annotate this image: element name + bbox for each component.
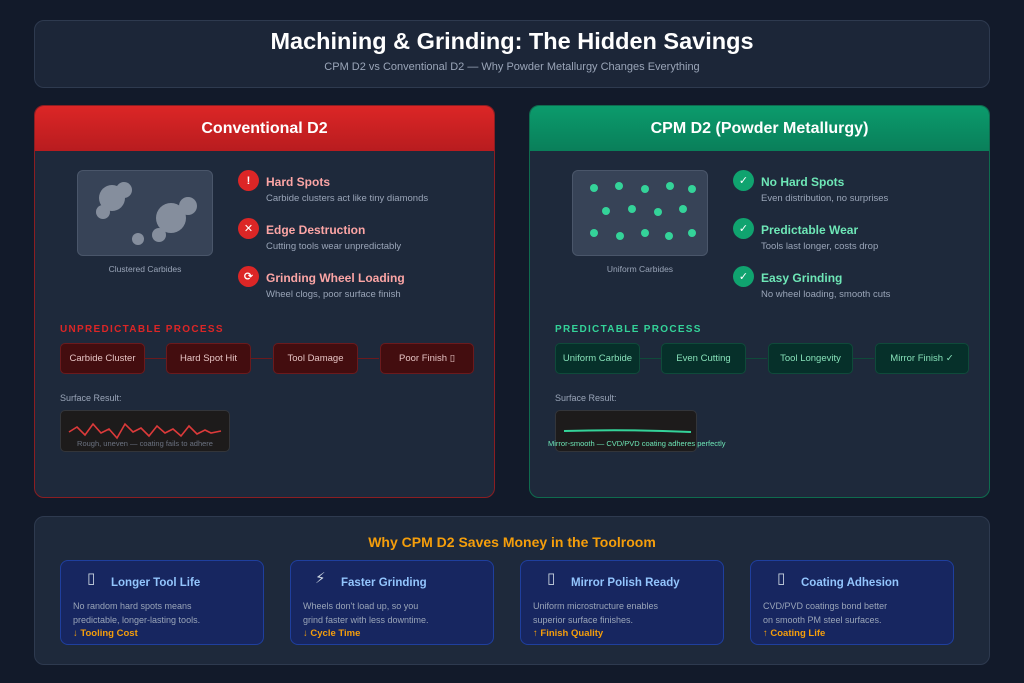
card: coating adhesion: ↑ Coating Life	[763, 628, 825, 639]
panel heading: CPM D2 (Powder Metallurgy)	[651, 120, 868, 137]
item: hard spots: Hard Spots	[266, 175, 330, 189]
item: edge destruction	[238, 218, 401, 252]
item: hard spots: Carbide clusters act like tiny diamonds	[266, 193, 428, 204]
process flow: Carbide Cluster	[70, 353, 136, 364]
panel: CPM D2	[529, 105, 990, 498]
card: longer tool life: ↓ Tooling Cost	[73, 628, 138, 639]
micrograph: uniform carbides	[572, 170, 708, 256]
process heading: UNPREDICTABLE PROCESS	[60, 324, 224, 335]
item: easy grinding: No wheel loading, smooth cuts	[761, 289, 890, 300]
item: predictable wear: Predictable Wear	[761, 223, 858, 237]
item: grinding wheel loading: Grinding Wheel Loading	[266, 271, 405, 285]
card: mirror polish	[520, 560, 724, 645]
micrograph label: Uniform Carbides	[607, 264, 673, 274]
process flow: Tool Damage	[288, 353, 343, 364]
item: hard spots: !	[247, 174, 250, 186]
process flow: Poor Finish ▯	[399, 353, 455, 364]
card: faster grinding: ⚡	[315, 570, 326, 587]
item: grinding wheel loading: Wheel clogs, poor surface finish	[266, 289, 401, 300]
card: mirror polish: superior surface finishes.	[533, 614, 633, 624]
process flow	[555, 343, 969, 374]
process heading: PREDICTABLE PROCESS	[555, 324, 702, 335]
card: faster grinding	[290, 560, 494, 645]
card: faster grinding: Wheels don't load up, so you	[303, 601, 418, 611]
surface chart: rough	[60, 410, 230, 452]
card: longer tool life	[60, 560, 264, 645]
process flow: Even Cutting	[676, 353, 731, 364]
item: no hard spots: ✓	[739, 175, 748, 187]
header	[34, 20, 990, 88]
card: longer tool life: No random hard spots means	[73, 601, 192, 611]
process flow: Uniform Carbide	[563, 353, 632, 364]
item: edge destruction: Cutting tools wear unpredictably	[266, 241, 401, 252]
micrograph label: Clustered Carbides	[109, 264, 181, 274]
card: longer tool life: Longer Tool Life	[111, 577, 200, 589]
item: edge destruction: Edge Destruction	[266, 223, 365, 237]
card: mirror polish: Uniform microstructure enables	[533, 601, 658, 611]
card: longer tool life: predictable, longer-lasting tools.	[73, 614, 200, 624]
surface chart: smooth: Mirror-smooth — CVD/PVD coating adheres perfectly	[548, 439, 726, 448]
process flow: Tool Longevity	[780, 353, 841, 364]
card: mirror polish: Mirror Polish Ready	[571, 577, 680, 589]
item: hard spots	[238, 170, 428, 204]
surface chart: smooth	[555, 410, 697, 452]
item: easy grinding: Easy Grinding	[761, 271, 842, 285]
item: predictable wear	[733, 218, 878, 252]
item: no hard spots: Even distribution, no surprises	[761, 193, 888, 204]
item: easy grinding: ✓	[739, 271, 748, 283]
card: mirror polish: ▯	[547, 570, 555, 587]
item: no hard spots: No Hard Spots	[761, 175, 844, 189]
micrograph: clustered carbides	[77, 170, 213, 256]
card: faster grinding: Faster Grinding	[341, 577, 427, 589]
panel heading	[35, 106, 494, 151]
item: edge destruction: ✕	[244, 223, 253, 235]
item: no hard spots	[733, 170, 888, 204]
process flow	[60, 343, 474, 374]
card: faster grinding: ↓ Cycle Time	[303, 628, 360, 639]
item: easy grinding	[733, 266, 890, 300]
process flow: Hard Spot Hit	[180, 353, 237, 364]
panel: conventional D2	[34, 105, 495, 498]
card: coating adhesion: Coating Adhesion	[801, 577, 899, 589]
card: longer tool life: ▯	[87, 570, 95, 587]
item: predictable wear: Tools last longer, costs drop	[761, 241, 878, 252]
item: predictable wear: ✓	[739, 223, 748, 235]
panel heading	[530, 106, 989, 151]
savings heading: Why CPM D2 Saves Money in the Toolroom	[368, 534, 656, 550]
card: coating adhesion: ▯	[777, 570, 785, 587]
surface label: Surface Result:	[60, 393, 122, 403]
panel: savings	[34, 516, 990, 665]
card: coating adhesion: CVD/PVD coatings bond better	[763, 601, 887, 611]
title: Machining & Grinding: The Hidden Savings	[270, 28, 754, 54]
item: grinding wheel loading: ⟳	[244, 271, 253, 283]
panel heading: Conventional D2	[201, 120, 328, 137]
surface label: Surface Result:	[555, 393, 617, 403]
surface chart: rough: Rough, uneven — coating fails to adhere	[77, 439, 213, 448]
card: faster grinding: grind faster with less downtime.	[303, 614, 429, 624]
process flow: Mirror Finish ✓	[890, 353, 954, 364]
subtitle: CPM D2 vs Conventional D2 — Why Powder Metallurgy Changes Everything	[324, 61, 700, 73]
card: coating adhesion	[750, 560, 954, 645]
card: mirror polish: ↑ Finish Quality	[533, 628, 603, 639]
card: coating adhesion: on smooth PM steel surfaces.	[763, 614, 882, 624]
item: grinding wheel loading	[238, 266, 405, 300]
